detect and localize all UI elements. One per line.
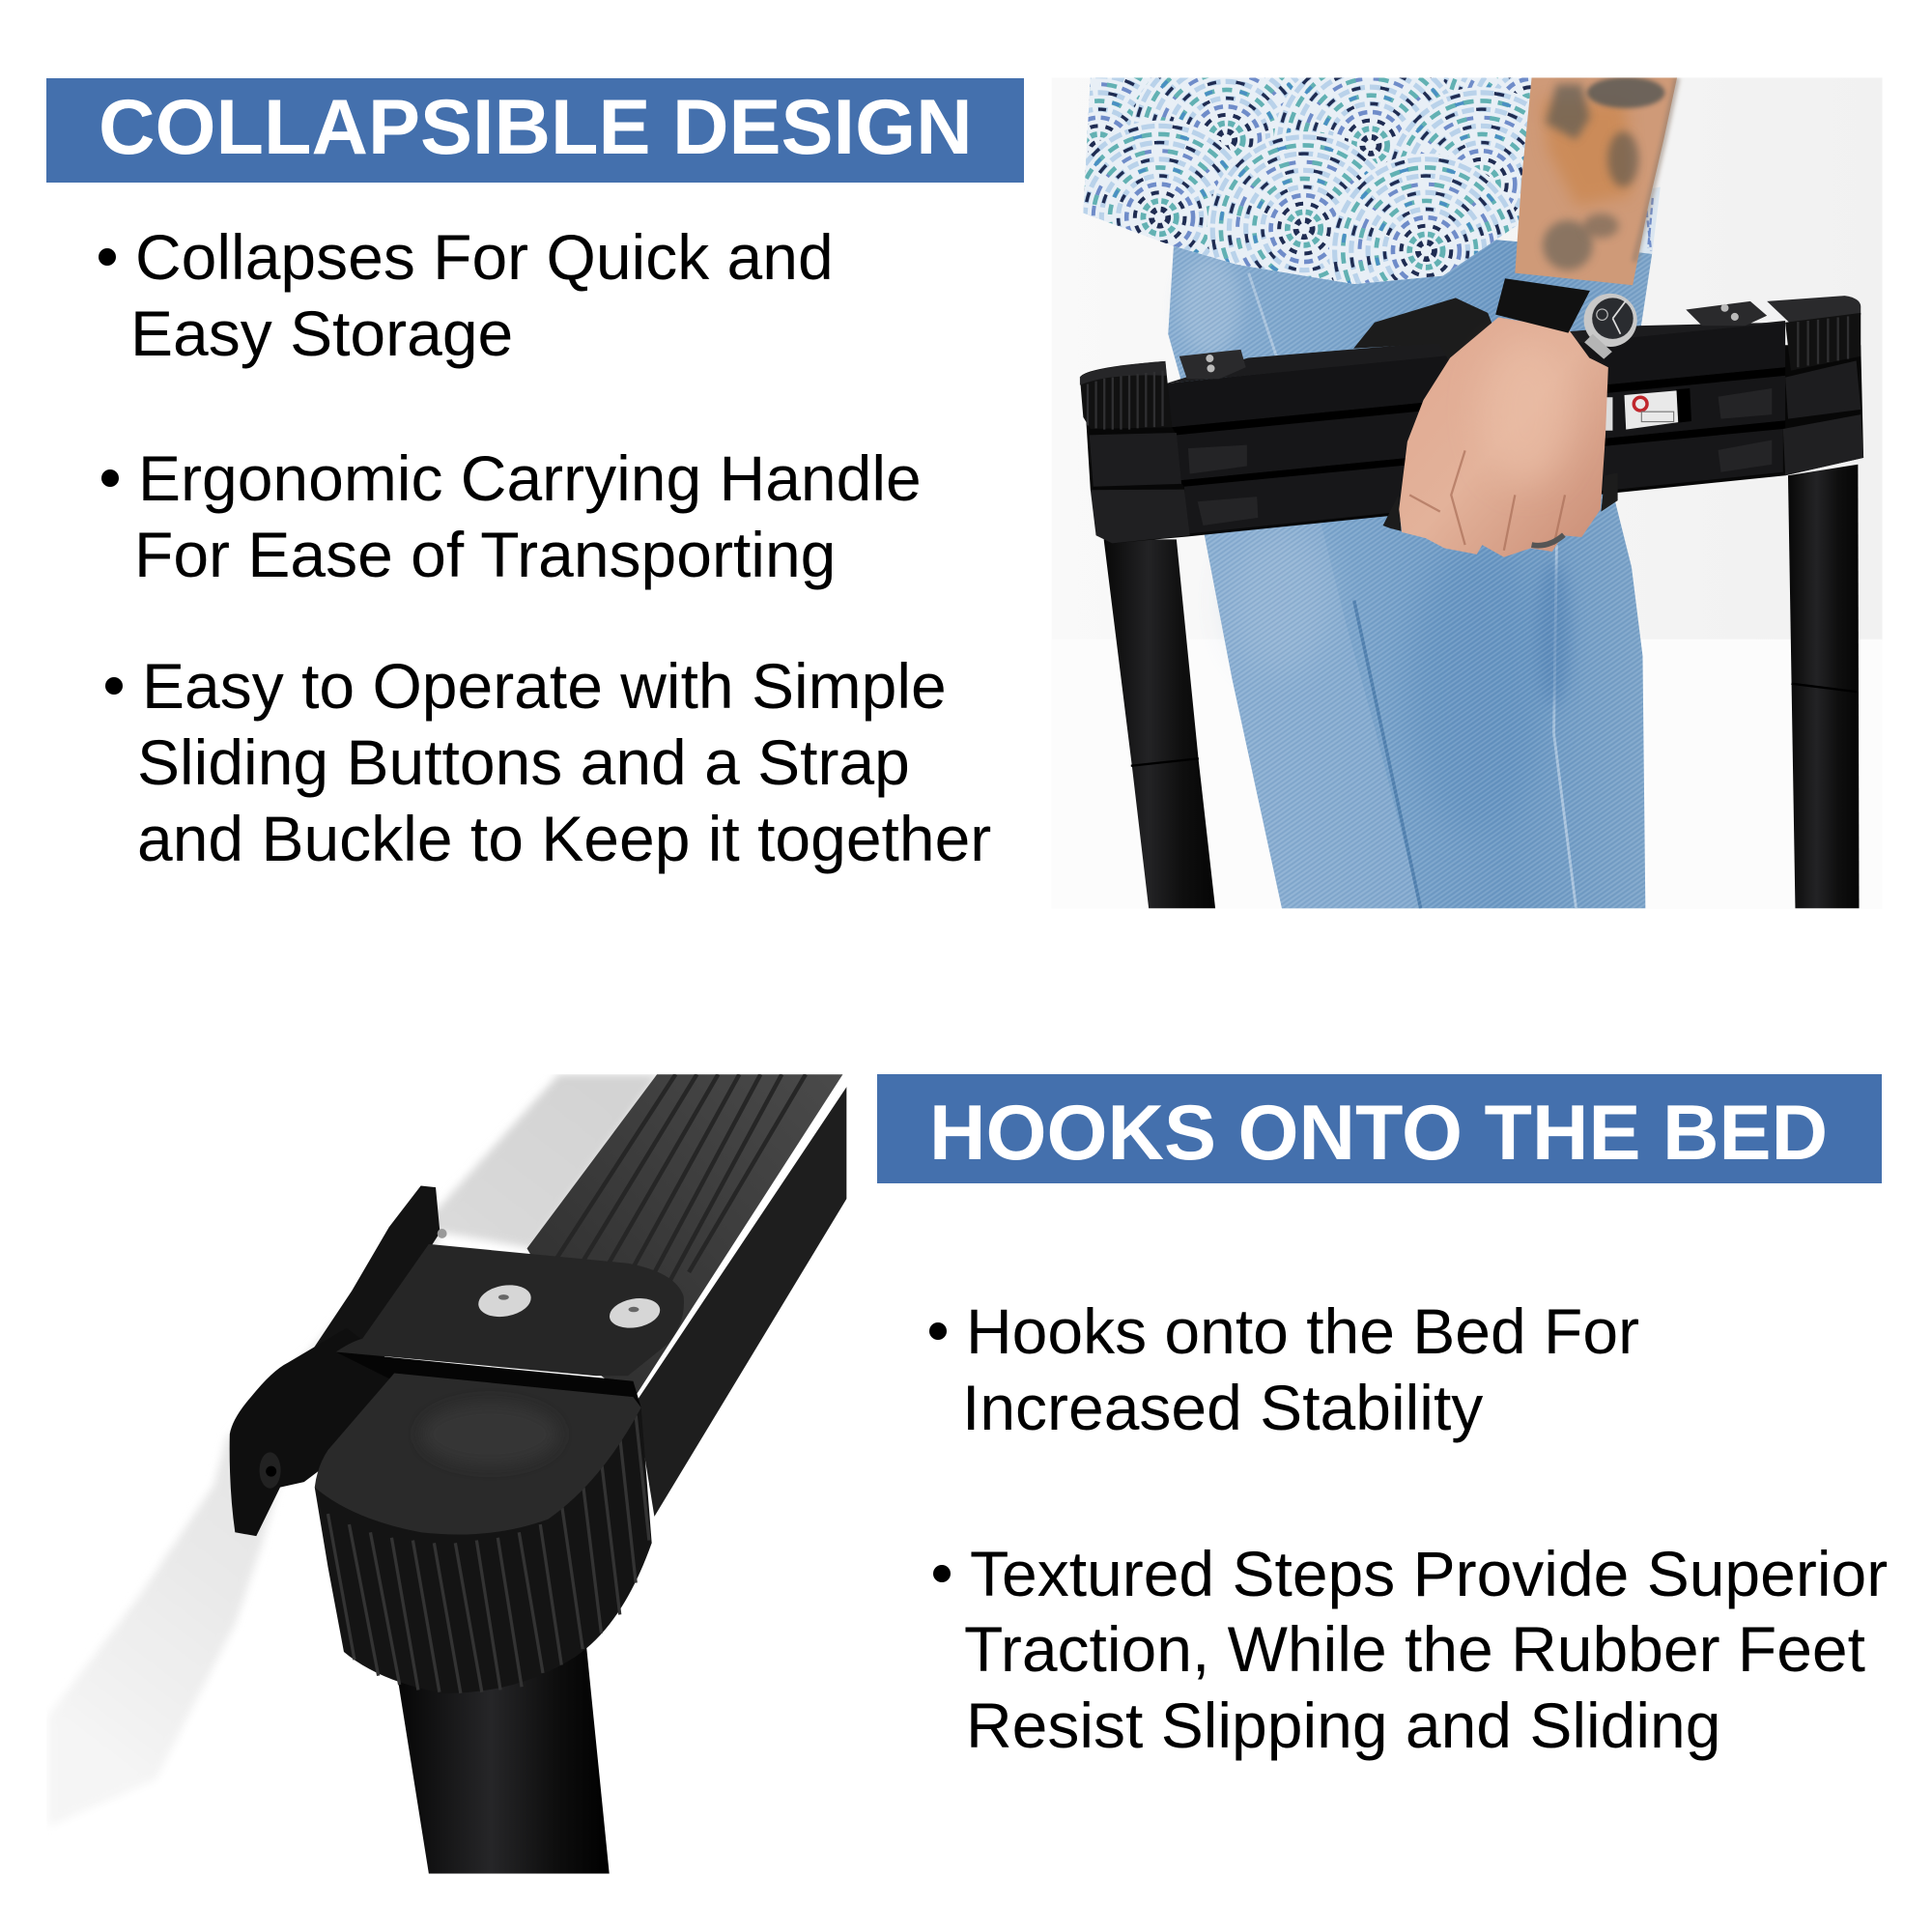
stool bars — [1085, 321, 1863, 543]
text block: hook features: Textured Steps Provide Superior — [970, 1538, 1888, 1609]
arm with tattoo — [1515, 77, 1677, 285]
jeans — [1168, 234, 1652, 908]
label — [1603, 388, 1691, 431]
text block: collapsible features: Sliding Buttons and a Strap — [137, 726, 910, 798]
text block: collapsible features: Easy to Operate with Simple — [142, 650, 947, 722]
hook brackets — [230, 1185, 447, 1536]
text block: collapsible features: Easy Storage — [130, 298, 513, 369]
banner: collapsible design: COLLAPSIBLE DESIGN — [99, 84, 973, 171]
text block: hook features: Hooks onto the Bed For — [966, 1295, 1639, 1367]
photo: hook and textured step detail — [46, 1074, 849, 1874]
text block: hook features: Resist Slipping and Sliding — [966, 1690, 1720, 1761]
treaded step — [527, 1074, 849, 1517]
watch — [1495, 278, 1637, 359]
shirt — [1002, 0, 1661, 348]
support leg — [394, 1635, 610, 1874]
joints — [1090, 433, 1181, 487]
end caps — [1080, 296, 1861, 430]
text block: collapsible features: For Ease of Transporting — [134, 519, 836, 590]
photo: person carrying collapsed step stool — [1080, 77, 1882, 908]
text block: collapsible features — [99, 221, 991, 874]
metal plate — [336, 1244, 684, 1407]
sliding buttons — [1188, 388, 1772, 526]
strap — [1353, 298, 1492, 355]
stool legs — [1104, 465, 1860, 908]
text block: hook features: Traction, While the Rubber Feet — [964, 1613, 1865, 1685]
text block: collapsible features: Collapses For Quick and — [135, 221, 834, 293]
hand — [1383, 318, 1618, 557]
wall shadow — [48, 1074, 660, 1827]
text block: hook features — [929, 1295, 1888, 1761]
text block: hook features: Increased Stability — [962, 1372, 1483, 1443]
ribbed foot cap — [315, 1373, 652, 1693]
text block: collapsible features: and Buckle to Keep it together — [137, 803, 991, 874]
text block: collapsible features: Ergonomic Carrying Handle — [138, 442, 922, 514]
plates and screws — [1179, 301, 1767, 379]
banner: hooks onto the bed: HOOKS ONTO THE BED — [929, 1090, 1828, 1177]
